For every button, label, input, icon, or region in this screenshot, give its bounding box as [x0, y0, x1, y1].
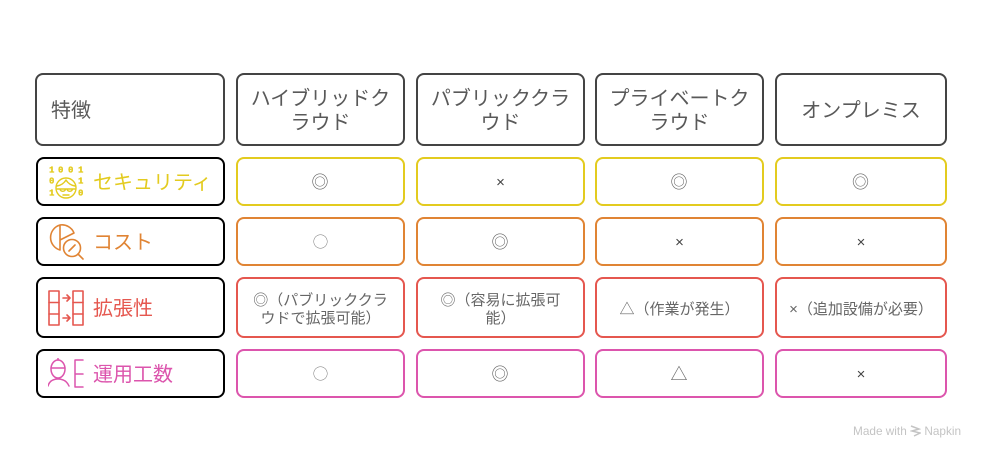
icon: security binary face: [49, 166, 84, 199]
cell: 運用工数 / パブリック: [416, 349, 585, 398]
cell: セキュリティ / パブリック: ×: [496, 174, 505, 191]
cell: 拡張性 / プライベート: [595, 277, 764, 338]
icon: worker with bracket: [48, 358, 84, 388]
icon: security binary face: 1: [49, 166, 55, 176]
cell: 運用工数 / オンプレミス: [775, 349, 947, 398]
header: パブリッククラウド: ウド: [480, 112, 520, 134]
icon: security binary face: 0: [58, 166, 63, 176]
cell: 運用工数 / パブリック: ◎: [492, 365, 508, 384]
icon: pie chart and magnifier: [50, 224, 84, 260]
cell: コスト / オンプレミス: ×: [857, 234, 865, 251]
cell: 運用工数 / オンプレミス: ×: [857, 366, 865, 383]
icon: security binary face: 0: [68, 166, 73, 176]
cell: 拡張性 / ハイブリッド: [236, 277, 405, 338]
cell: セキュリティ / パブリック: [416, 157, 585, 206]
row label: セキュリティ: セキュリティ: [93, 172, 212, 194]
icon: expanding columns: [48, 290, 84, 326]
cell: セキュリティ / オンプレミス: [775, 157, 947, 206]
cell: コスト / ハイブリッド: ◯: [313, 234, 328, 251]
icon: security binary face: 0: [49, 176, 54, 186]
header: ハイブリッドクラウド: [236, 73, 405, 146]
header: オンプレミス: オンプレミス: [801, 100, 921, 122]
cell: 拡張性 / オンプレミス: [775, 277, 947, 338]
header: プライベートクラウド: プライベートク: [610, 88, 750, 110]
cell: コスト / プライベート: [595, 217, 764, 266]
row label: コスト: [36, 217, 225, 266]
row label: コスト: コスト: [93, 232, 153, 254]
header: プライベートクラウド: [595, 73, 764, 146]
cell: 拡張性 / ハイブリッド: ウドで拡張可能）: [260, 310, 380, 326]
icon: security binary face: 1: [78, 166, 84, 176]
cell: セキュリティ / ハイブリッド: [236, 157, 405, 206]
header: 特徴: 特徴: [51, 100, 91, 122]
cell: 運用工数 / ハイブリッド: [236, 349, 405, 398]
cell: セキュリティ / プライベート: [595, 157, 764, 206]
row label: 運用工数: [36, 349, 225, 398]
cell: 拡張性 / パブリック: ◎（容易に拡張可: [440, 292, 560, 308]
watermark: Made with Napkin: Made with Napkin: [853, 424, 961, 438]
cell: コスト / パブリック: ◎: [492, 233, 508, 252]
row label: 拡張性: 拡張性: [93, 298, 153, 320]
icon: security binary face: 1: [49, 188, 55, 198]
cell: 運用工数 / プライベート: [595, 349, 764, 398]
cell: 拡張性 / ハイブリッド: ◎（パブリッククラ: [253, 292, 388, 308]
cell: コスト / パブリック: [416, 217, 585, 266]
icon: security binary face: 1: [78, 176, 84, 186]
cell: セキュリティ / ハイブリッド: ◎: [312, 173, 328, 192]
header: パブリッククラウド: [416, 73, 585, 146]
cell: 運用工数 / ハイブリッド: ◯: [313, 366, 328, 383]
cell: セキュリティ / オンプレミス: ◎: [852, 173, 869, 192]
cell: コスト / プライベート: ×: [675, 234, 684, 251]
cell: 拡張性 / オンプレミス: ×（追加設備が必要）: [789, 300, 933, 318]
cell: 拡張性 / パブリック: 能）: [485, 310, 516, 326]
row label: 運用工数: 運用工数: [93, 364, 173, 386]
cell: 拡張性 / プライベート: △（作業が発生）: [619, 300, 740, 318]
icon: security binary face: 0: [78, 188, 83, 198]
header: ハイブリッドクラウド: ラウド: [290, 112, 350, 134]
row label: 拡張性: [36, 277, 225, 338]
header: プライベートクラウド: ラウド: [650, 112, 710, 134]
header: オンプレミス: [775, 73, 947, 146]
header: 特徴: [35, 73, 225, 146]
cell: 運用工数 / プライベート: △: [670, 365, 688, 384]
cell: セキュリティ / プライベート: ◎: [670, 173, 688, 192]
cell: コスト / ハイブリッド: [236, 217, 405, 266]
cell: 拡張性 / パブリック: [416, 277, 585, 338]
header: ハイブリッドクラウド: ハイブリッドク: [251, 88, 390, 110]
row label: セキュリティ: [36, 157, 225, 206]
header: パブリッククラウド: パブリッククラ: [431, 88, 570, 110]
cell: コスト / オンプレミス: [775, 217, 947, 266]
